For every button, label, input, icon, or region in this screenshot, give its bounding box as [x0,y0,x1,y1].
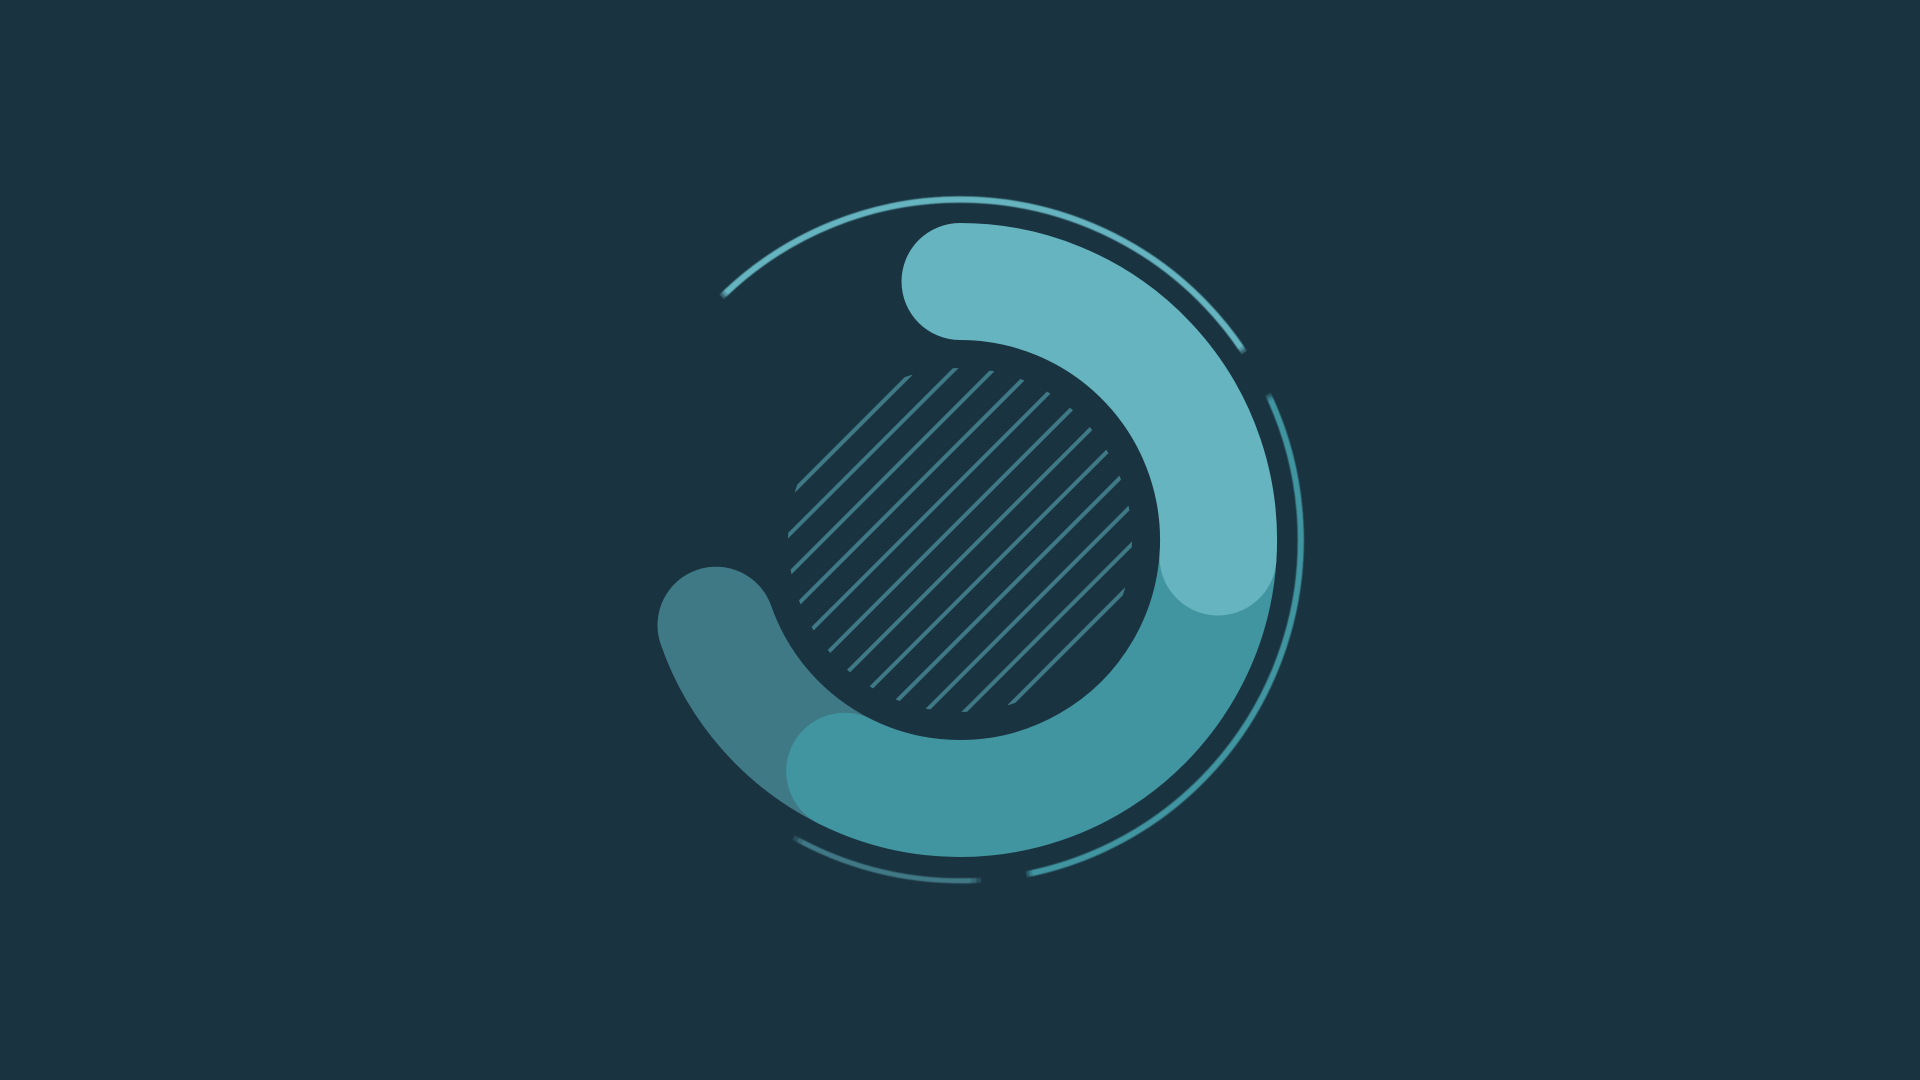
hatched centre circle [788,368,1132,712]
light band segment [960,282,1219,557]
thin outer arc: dim [600,180,1320,900]
dim band segment [716,625,845,771]
thin outer arc: light [478,58,1442,1022]
thin outer arc: medium [507,87,1413,993]
medium band segment [845,557,1218,798]
circular ring graphic [658,196,1304,884]
